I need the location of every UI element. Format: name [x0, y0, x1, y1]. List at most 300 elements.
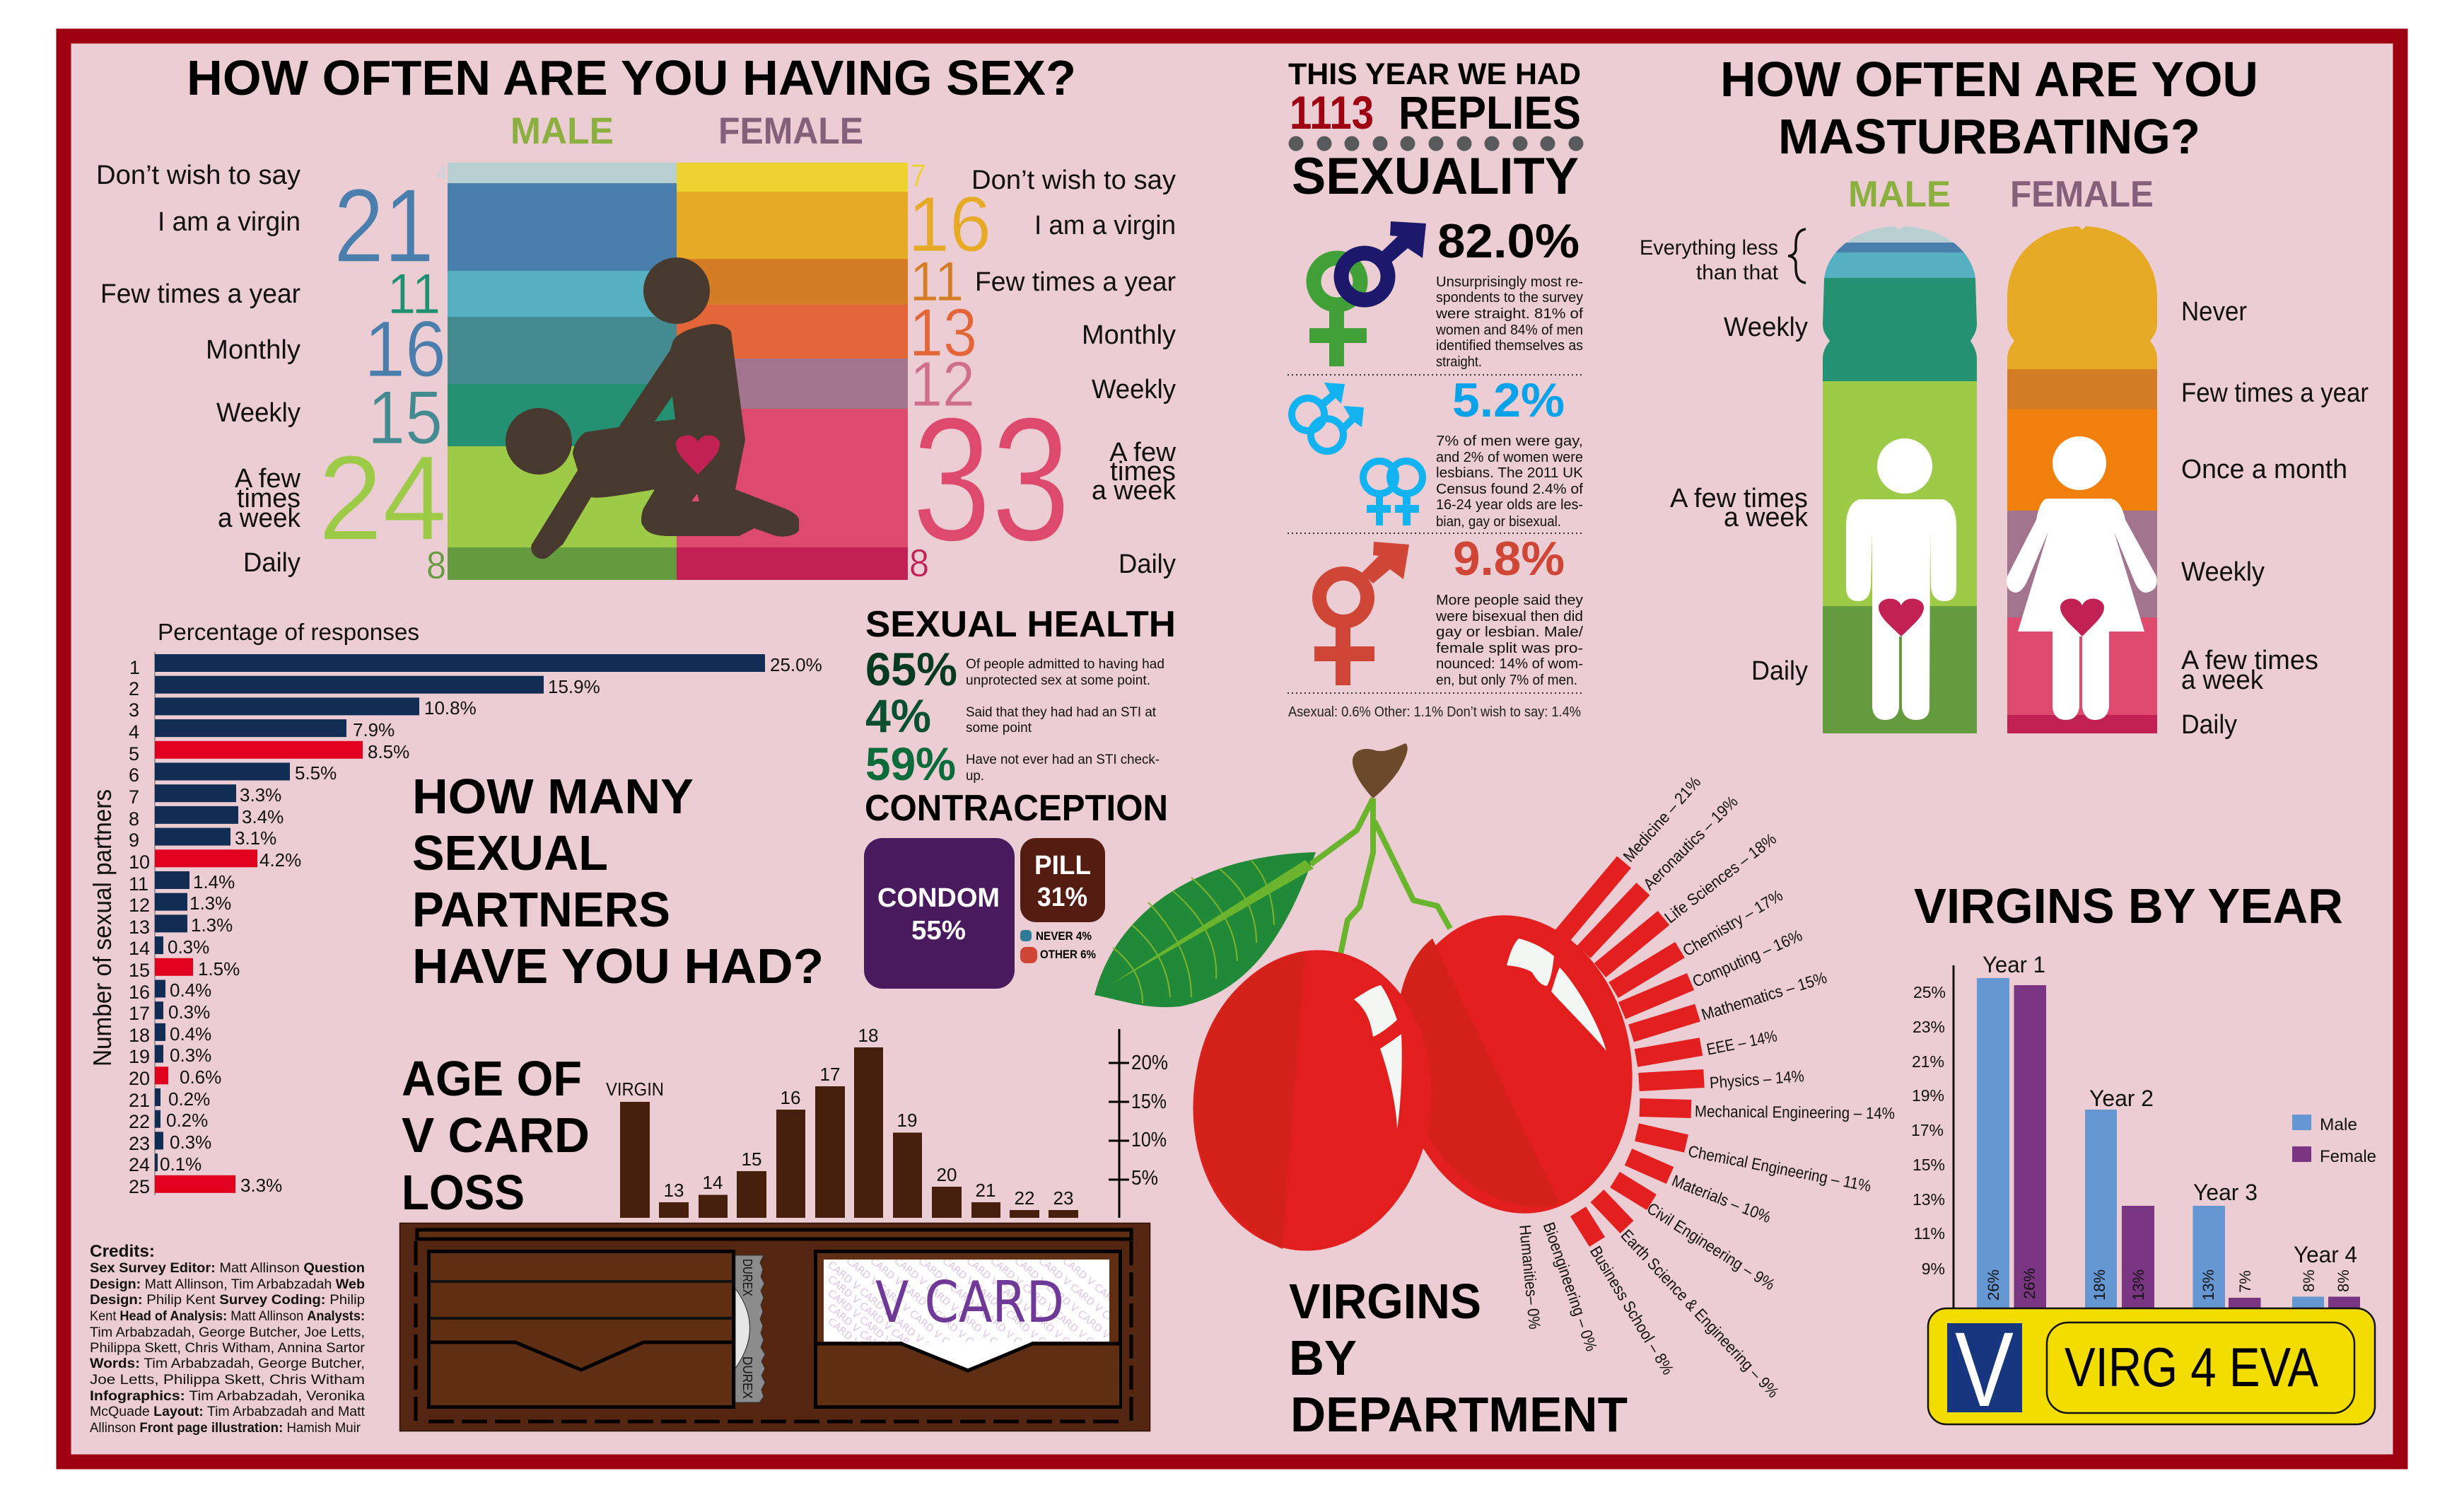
- female row labels: Weekly: [1092, 375, 1176, 405]
- column chart: age: 17: [820, 1064, 840, 1085]
- stat: 82.0%: 82.0%: [1437, 214, 1580, 268]
- female row labels: a week: [1092, 476, 1176, 506]
- radial labels: departments: Mathematics – 15%: [1699, 968, 1829, 1023]
- male labels: A few times: [1670, 484, 1808, 513]
- column chart: age: 21: [976, 1180, 995, 1201]
- radial labels: departments: Physics – 14%: [1709, 1066, 1805, 1092]
- card background pattern: CARD V CARD V CARD V CARD V CARD V CARD V: [988, 1255, 1183, 1421]
- panel: how often masturbating: [1640, 52, 2369, 740]
- horizontal bar chart: 20: [129, 1068, 150, 1089]
- male row labels: A few: [235, 464, 301, 494]
- radial labels: departments: Mechanical Engineering – 14%: [1695, 1102, 1895, 1122]
- text block: straight: spondents to the survey: [1436, 290, 1583, 306]
- legend: never and other: [1020, 929, 1096, 963]
- horizontal bar chart: 8: [129, 808, 139, 830]
- illustration: left cherry: [1179, 938, 1446, 1262]
- card background pattern: CARD V CARD V CARD V CARD V CARD V CARD V: [916, 1255, 1111, 1421]
- heading: age of v card loss: LOSS: [402, 1165, 525, 1220]
- horizontal bar chart: 1: [129, 657, 140, 678]
- horizontal bar chart: 8.5%: [368, 741, 409, 762]
- legend: Female: [2320, 1147, 2376, 1166]
- stat: 5.2%: 5.2%: [1452, 373, 1565, 427]
- panel: age of v card loss: [399, 1028, 1168, 1431]
- male labels: [1670, 313, 1809, 686]
- text block: bisexual: female split was pro-: [1436, 641, 1583, 656]
- credits text: Allinson Front page illustration: Hamish Muir: [90, 1421, 361, 1436]
- card background pattern: CARD V CARD V CARD V CARD V CARD V CARD V: [1012, 1255, 1207, 1421]
- text block: gay and lesbian: 16-24 year olds are les-: [1436, 497, 1583, 513]
- text block: gay and lesbian: [1436, 434, 1584, 530]
- horizontal bar chart: 24: [129, 1154, 150, 1175]
- radial labels: departments: Earth Science & Engineering – 9%: [1617, 1226, 1782, 1401]
- male row labels: Few times a year: [100, 279, 300, 309]
- text block: straight: were straight. 81% of: [1435, 306, 1583, 322]
- horizontal bar chart: 7: [129, 786, 139, 808]
- heading: 1113: 1113: [1290, 86, 1374, 139]
- panel: sexual health and contraception: [864, 604, 1176, 989]
- credits text: Words: Tim Arbabzadah, George Butcher,: [90, 1356, 365, 1371]
- card background pattern: CARD V CARD V CARD V: [1060, 1255, 1160, 1342]
- heading: how often are you masturbating: [1720, 52, 2258, 164]
- female row labels: Daily: [1119, 550, 1176, 579]
- condom wrapper: DUREX: [740, 1356, 754, 1399]
- column chart: age: 22: [1015, 1187, 1034, 1209]
- male labels: Weekly: [1724, 313, 1808, 342]
- male percentage numbers: 4: [436, 163, 446, 184]
- card background pattern: CARD V CARD V CARD V CARD V: [1036, 1255, 1167, 1368]
- horizontal bar chart: 0.2%: [168, 1088, 210, 1110]
- horizontal bar chart: 21: [129, 1090, 150, 1111]
- horizontal bar chart: 0.4%: [170, 1023, 211, 1045]
- male row labels: Don’t wish to say: [96, 161, 300, 190]
- female percentage numbers: 12: [910, 349, 975, 420]
- horizontal bar chart: 19: [129, 1046, 150, 1067]
- horizontal bar chart: 9: [129, 830, 139, 851]
- column chart: age: 14: [703, 1172, 723, 1193]
- icon: bisexual symbol: [1314, 542, 1409, 685]
- credits text: [90, 1261, 366, 1436]
- female labels: Few times a year: [2181, 378, 2369, 408]
- horizontal bar chart: 11: [129, 873, 148, 895]
- panel: how often having sex: [96, 50, 1176, 587]
- horizontal bar chart: 1.4%: [193, 871, 235, 893]
- text block: gay and lesbian: and 2% of women were: [1436, 450, 1583, 465]
- horizontal bar chart: 6: [129, 764, 139, 786]
- horizontal bar chart: 3.3%: [240, 1175, 282, 1196]
- male percentage numbers: 16: [364, 305, 446, 393]
- radial labels: departments: Civil Engineering – 9%: [1644, 1199, 1778, 1293]
- axis labels: 17%: [1911, 1121, 1944, 1139]
- horizontal bar chart: [129, 654, 822, 1197]
- radial labels: departments: Bioengineering – 0%: [1540, 1220, 1601, 1354]
- radial labels: departments: [1516, 773, 1895, 1401]
- icon: lesbian symbols: [1363, 461, 1423, 525]
- text block: gay and lesbian: lesbians. The 2011 UK: [1436, 465, 1584, 481]
- icon: male figure: [1846, 438, 1956, 720]
- horizontal bar chart: 4.2%: [259, 849, 301, 871]
- card background pattern: CARD V CARD V CARD V CARD V CARD V CARD V: [868, 1255, 1063, 1421]
- tile: pill 31%: PILL: [1034, 851, 1091, 880]
- heading: how many sexual partners have you had: PARTNERS: [412, 882, 670, 937]
- heading: age of v card loss: AGE OF: [402, 1051, 582, 1106]
- illustration: stem leaf: [1353, 743, 1408, 798]
- horizontal bar chart: 18: [129, 1025, 150, 1046]
- female row labels: times: [1110, 457, 1176, 487]
- female percentage numbers: 16: [908, 181, 991, 268]
- icon: straight symbols: [1309, 221, 1426, 366]
- stat: 65%: 65%: [865, 643, 957, 695]
- axis title: number of sexual partners: Number of sexual partners: [88, 789, 117, 1066]
- heading: virgins by department: VIRGINS: [1289, 1274, 1481, 1329]
- heading: how many sexual partners have you had: [412, 769, 824, 994]
- heading: male: MALE: [510, 110, 614, 152]
- credits text: Sex Survey Editor: Matt Allinson Question: [90, 1261, 365, 1276]
- text block: gay and lesbian: Census found 2.4% of: [1436, 482, 1583, 497]
- horizontal bar chart: 0.3%: [168, 1001, 210, 1023]
- year labels: Year 2: [2089, 1086, 2154, 1111]
- female percentage numbers: 11: [910, 250, 964, 313]
- horizontal bar chart: 1.3%: [189, 893, 231, 914]
- text block: bisexual: nounced: 14% of wom-: [1436, 656, 1583, 672]
- horizontal bar chart: 5: [129, 743, 139, 764]
- male row labels: times: [237, 484, 300, 513]
- heading: female: FEMALE: [718, 110, 863, 152]
- male row labels: a week: [218, 504, 301, 533]
- card background pattern: CARD V CARD V CARD V CARD V CARD V CARD V: [825, 1274, 1020, 1439]
- heading: male: MALE: [1848, 174, 1951, 215]
- column chart: age: 19: [897, 1110, 917, 1131]
- female percentage numbers: 8: [909, 541, 929, 585]
- female percentage numbers: [908, 158, 1070, 585]
- axis labels: 25%: [1913, 983, 1946, 1001]
- label: everything less than that with brace: [1640, 229, 1806, 284]
- text: 59% note: up.: [966, 769, 984, 784]
- horizontal bar chart: 3.3%: [240, 784, 281, 806]
- horizontal bar chart: 0.2%: [166, 1110, 208, 1131]
- text: 4% note: [966, 705, 1157, 736]
- grouped bars: male and female: 13%: [2200, 1269, 2217, 1301]
- female row labels: [971, 165, 1176, 579]
- radial bars: department percentages: [1562, 862, 1704, 1242]
- panel: sexuality: [1288, 57, 1584, 720]
- horizontal bar chart: 3.1%: [235, 827, 276, 849]
- axis labels: 19%: [1912, 1086, 1944, 1105]
- column chart: age: 15: [742, 1149, 761, 1170]
- icon: gay male symbols: [1292, 383, 1364, 451]
- panel: sexual partners chart: [88, 619, 824, 1197]
- column chart: age: 23: [1053, 1187, 1073, 1209]
- text block: gay and lesbian: 7% of men were gay,: [1436, 434, 1583, 449]
- heading: virgins by department: BY: [1289, 1330, 1357, 1385]
- card background pattern: CARD V CARD V CARD V CARD V CARD V CARD V: [825, 1288, 1020, 1453]
- text block: straight: [1435, 274, 1583, 370]
- horizontal bar chart: 25: [129, 1176, 150, 1197]
- axis labels: 13%: [1913, 1190, 1945, 1209]
- text: 59% note: Have not ever had an STI check-: [966, 752, 1160, 767]
- card background pattern: [829, 1260, 1109, 1342]
- credits text: Design: Matt Allinson, Tim Arbabzadah Web: [90, 1277, 365, 1292]
- text block: bisexual: en, but only 7% of men.: [1436, 673, 1577, 688]
- horizontal bar chart: 5.5%: [295, 762, 337, 784]
- year labels: [1983, 952, 2357, 1267]
- radial labels: departments: Medicine – 21%: [1619, 773, 1704, 866]
- female labels: Daily: [2181, 710, 2237, 740]
- female row labels: Monthly: [1082, 320, 1176, 350]
- female percentage numbers: 7: [910, 158, 926, 194]
- horizontal bar chart: 10: [129, 851, 150, 873]
- heading: virgins by department: DEPARTMENT: [1290, 1387, 1628, 1442]
- label: everything less than that with brace: than that: [1696, 261, 1779, 284]
- credits text: Design: Philip Kent Survey Coding: Philip: [90, 1293, 365, 1308]
- credits text: Infographics: Tim Arbabzadah, Veronika: [90, 1389, 365, 1404]
- v card title: V CARD: [875, 1269, 1064, 1335]
- tile: condom 55%: 55%: [911, 916, 966, 946]
- icon: couple silhouette with heart: [506, 257, 799, 559]
- heading: how many sexual partners have you had: HAVE YOU HAD?: [412, 938, 824, 994]
- credits text: McQuade Layout: Tim Arbabzadah and Matt: [90, 1405, 366, 1419]
- panel: virgins by year: [1911, 878, 2376, 1429]
- grouped bars: male and female: 8%: [2335, 1269, 2352, 1292]
- axis labels: 11%: [1914, 1224, 1945, 1243]
- axis labels: [1911, 983, 1946, 1278]
- horizontal bar chart: 0.3%: [168, 936, 209, 958]
- illustration: stems: [1311, 798, 1450, 954]
- male labels: Daily: [1751, 656, 1808, 686]
- text block: bisexual: gay or lesbian. Male/: [1436, 624, 1583, 640]
- text block: straight: Unsurprisingly most re-: [1436, 274, 1583, 290]
- column chart: age: [606, 1025, 1078, 1218]
- horizontal bar chart: 10.8%: [424, 697, 477, 719]
- radial labels: departments: Life Sciences – 18%: [1661, 830, 1780, 926]
- illustration: number plate: V: [1955, 1310, 2014, 1429]
- credits text: Kent Head of Analysis: Matt Allinson Analysts:: [90, 1309, 365, 1324]
- axis: percentage scale: 20%: [1131, 1052, 1168, 1074]
- horizontal bar chart: 16: [129, 982, 150, 1003]
- text block: bisexual: [1435, 593, 1583, 688]
- heading: sexuality: SEXUALITY: [1292, 148, 1579, 205]
- axis: percentage scale: 10%: [1131, 1129, 1167, 1151]
- grouped bars: male and female: 13%: [2130, 1269, 2147, 1301]
- chart title: percentage of responses: Percentage of responses: [158, 619, 419, 645]
- heading: age of v card loss: [402, 1051, 590, 1220]
- radial labels: departments: Materials – 10%: [1669, 1171, 1774, 1226]
- heading: sexual health: SEXUAL HEALTH: [865, 604, 1176, 645]
- female labels: A few times: [2181, 646, 2318, 675]
- female labels: Weekly: [2181, 557, 2265, 587]
- grouped bars: male and female: 26%: [2021, 1268, 2038, 1299]
- column chart: age: 18: [858, 1025, 878, 1046]
- male percentage numbers: 8: [426, 543, 446, 587]
- text: 65% note: [966, 657, 1164, 688]
- text block: straight: identified themselves as: [1436, 338, 1583, 354]
- panel: credits: [90, 1242, 366, 1436]
- horizontal bar chart: 0.1%: [160, 1153, 202, 1175]
- condom wrapper: [735, 1255, 765, 1402]
- heading: how many sexual partners have you had: HOW MANY: [412, 769, 694, 824]
- female row labels: Few times a year: [975, 267, 1176, 297]
- radial labels: departments: Computing – 16%: [1690, 926, 1805, 991]
- text: 65% note: unprotected sex at some point.: [966, 673, 1150, 688]
- radial labels: departments: Business School – 8%: [1587, 1243, 1678, 1378]
- grouped bars: male and female: 7%: [2236, 1270, 2254, 1293]
- female labels: a week: [2181, 665, 2264, 695]
- horizontal bar chart: 3: [129, 699, 139, 721]
- text block: straight: straight.: [1436, 354, 1482, 370]
- female labels: Never: [2181, 297, 2247, 327]
- male row labels: Weekly: [216, 398, 300, 428]
- column chart: age: 16: [781, 1087, 800, 1108]
- heading: age of v card loss: V CARD: [402, 1107, 590, 1163]
- male percentage numbers: 21: [334, 168, 434, 284]
- legend: never and other: OTHER 6%: [1040, 948, 1096, 961]
- legend: Male: [2320, 1115, 2357, 1134]
- female percentage numbers: 13: [909, 295, 977, 371]
- radial labels: departments: Chemical Engineering – 11%: [1687, 1141, 1873, 1195]
- heading: female: FEMALE: [2010, 174, 2154, 215]
- horizontal bar chart: 25.0%: [770, 654, 822, 675]
- radial labels: departments: Chemistry – 17%: [1679, 885, 1786, 960]
- illustration: number plate: VIRG 4 EVA: [2065, 1336, 2318, 1398]
- text block: gay and lesbian: bian, gay or bisexual.: [1436, 514, 1561, 530]
- text: 59% note: [966, 752, 1160, 784]
- tile: pill 31%: 31%: [1037, 883, 1087, 912]
- stat: 9.8%: 9.8%: [1453, 532, 1565, 586]
- heading: how often are you masturbating: HOW OFTEN ARE YOU: [1720, 52, 2258, 107]
- male percentage numbers: 11: [387, 262, 440, 326]
- horizontal bar chart: 13: [129, 917, 150, 938]
- column chart: age: 13: [664, 1180, 684, 1201]
- radial labels: departments: Humanities– 0%: [1516, 1224, 1544, 1330]
- horizontal bar chart: 15.9%: [548, 676, 600, 697]
- horizontal bar chart: 0.3%: [170, 1132, 211, 1153]
- heading: how often are you having sex: HOW OFTEN ARE YOU HAVING SEX?: [187, 50, 1076, 105]
- panel: virgins by department: [1094, 743, 1895, 1442]
- right wallet pocket with v card: [814, 1250, 1122, 1409]
- radial labels: departments: EEE – 14%: [1705, 1026, 1779, 1059]
- credits text: Philippa Skett, Chris Witham, Annina Sartor: [90, 1341, 366, 1356]
- horizontal bar chart: 14: [129, 938, 150, 959]
- grouped bars: male and female: [1977, 978, 2360, 1308]
- horizontal bar chart: 2: [129, 678, 139, 699]
- heading: replies: REPLIES: [1399, 86, 1581, 139]
- tile: condom 55%: [864, 838, 1015, 989]
- axis: percentage scale: 5%: [1131, 1167, 1158, 1190]
- left wallet pocket: [428, 1252, 734, 1407]
- male row labels: I am a virgin: [158, 207, 300, 237]
- text: 4% note: some point: [966, 721, 1032, 736]
- card background pattern: CARD V CARD V CARD V CARD V CARD V CARD V: [892, 1255, 1087, 1421]
- axis: percentage scale: [1109, 1029, 1168, 1218]
- horizontal bar chart: 1.3%: [191, 914, 233, 936]
- stacked bar: female: [677, 163, 908, 580]
- illustration: leaf: [1094, 852, 1316, 1007]
- illustration: wallet: [399, 1222, 1151, 1431]
- heading: this year we had: THIS YEAR WE HAD: [1288, 57, 1581, 91]
- footnote: other sexualities: Asexual: 0.6% Other: 1.1% Don’t wish to say: 1.4%: [1288, 704, 1581, 720]
- male percentage numbers: [318, 163, 447, 587]
- heading: how often are you masturbating: MASTURBATING?: [1778, 109, 2200, 164]
- bottle: female: [2001, 223, 2164, 737]
- axis labels: 21%: [1912, 1052, 1944, 1071]
- horizontal bar chart: 23: [129, 1133, 150, 1154]
- column chart: age: 20: [937, 1164, 957, 1185]
- label: everything less than that with brace: Everything less: [1640, 236, 1778, 260]
- female row labels: Don’t wish to say: [971, 165, 1176, 195]
- grouped bars: male and female: 8%: [2300, 1269, 2318, 1292]
- year labels: Year 3: [2193, 1180, 2258, 1205]
- stat: 59%: 59%: [865, 738, 956, 790]
- condom wrapper: DUREX: [740, 1259, 754, 1296]
- tile: condom 55%: CONDOM: [877, 883, 1000, 913]
- horizontal bar chart: 7.9%: [353, 719, 395, 740]
- male row labels: Daily: [243, 548, 300, 578]
- bottle: male: [1817, 223, 1983, 737]
- axis labels: 9%: [1922, 1260, 1945, 1278]
- horizontal bar chart: 22: [129, 1111, 150, 1132]
- illustration: number plate: [1928, 1308, 2375, 1429]
- horizontal bar chart: 1.5%: [198, 958, 240, 979]
- card background pattern: CARD V CARD V CARD V CARD V CARD V CARD V: [825, 1302, 1020, 1467]
- horizontal bar chart: 3.4%: [242, 806, 284, 827]
- male percentage numbers: 15: [368, 375, 443, 460]
- legend: [2292, 1115, 2376, 1166]
- legend: never and other: NEVER 4%: [1036, 929, 1092, 943]
- female percentage numbers: 33: [912, 380, 1070, 578]
- card background pattern: CARD V CARD V CARD V CARD V CARD V CARD V: [940, 1255, 1135, 1421]
- year labels: Year 4: [2294, 1242, 2357, 1267]
- male percentage numbers: 24: [318, 431, 447, 566]
- heading: contraception: CONTRACEPTION: [865, 788, 1168, 829]
- female labels: [2181, 297, 2369, 740]
- axis: percentage scale: 15%: [1131, 1091, 1167, 1113]
- female labels: Once a month: [2181, 455, 2347, 484]
- horizontal bar chart: 0.3%: [170, 1045, 211, 1066]
- icon: female figure: [2007, 436, 2157, 720]
- credits text: Joe Letts, Philippa Skett, Chris Witham: [90, 1373, 365, 1388]
- radial labels: departments: Aeronautics – 19%: [1640, 792, 1741, 893]
- heading: virgins by department: [1289, 1274, 1628, 1442]
- card background pattern: CARD V CARD V CARD V CARD V CARD V CARD V: [964, 1255, 1159, 1421]
- year labels: Year 1: [1983, 952, 2045, 977]
- grouped bars: male and female: 26%: [1985, 1269, 2002, 1301]
- text block: bisexual: More people said they: [1436, 593, 1583, 608]
- heading: how many sexual partners have you had: SEXUAL: [412, 825, 608, 880]
- male labels: a week: [1724, 503, 1809, 533]
- text block: bisexual: were bisexual then did: [1435, 609, 1583, 624]
- heading: virgins by year: VIRGINS BY YEAR: [1914, 878, 2343, 934]
- horizontal bar chart: 0.6%: [180, 1066, 221, 1088]
- column chart: age: VIRGIN: [606, 1079, 664, 1100]
- female row labels: A few: [1109, 438, 1176, 467]
- dotted row separator: [1288, 136, 1584, 151]
- card background pattern: CARD V CARD V CARD V CARD V CARD V CARD V: [825, 1260, 1020, 1425]
- stacked bar: male: [448, 163, 677, 580]
- text: 4% note: Said that they had had an STI at: [966, 705, 1157, 720]
- grouped bars: male and female: 18%: [2091, 1269, 2108, 1301]
- text block: straight: women and 84% of men: [1435, 322, 1583, 338]
- text: 65% note: Of people admitted to having had: [966, 657, 1164, 672]
- card background pattern: CARD V CARD V CARD V CARD V: [825, 1316, 957, 1429]
- horizontal bar chart: 15: [129, 960, 150, 981]
- stat: 4%: 4%: [865, 690, 931, 742]
- female row labels: I am a virgin: [1034, 211, 1176, 240]
- male row labels: Monthly: [206, 335, 300, 365]
- horizontal bar chart: 17: [129, 1003, 150, 1024]
- axis labels: 15%: [1913, 1156, 1945, 1174]
- horizontal bar chart: 4: [129, 721, 139, 743]
- credits heading: Credits:: [90, 1242, 155, 1261]
- card background pattern: CARD V CARD V CARD V CARD V CARD V CARD V: [843, 1255, 1039, 1421]
